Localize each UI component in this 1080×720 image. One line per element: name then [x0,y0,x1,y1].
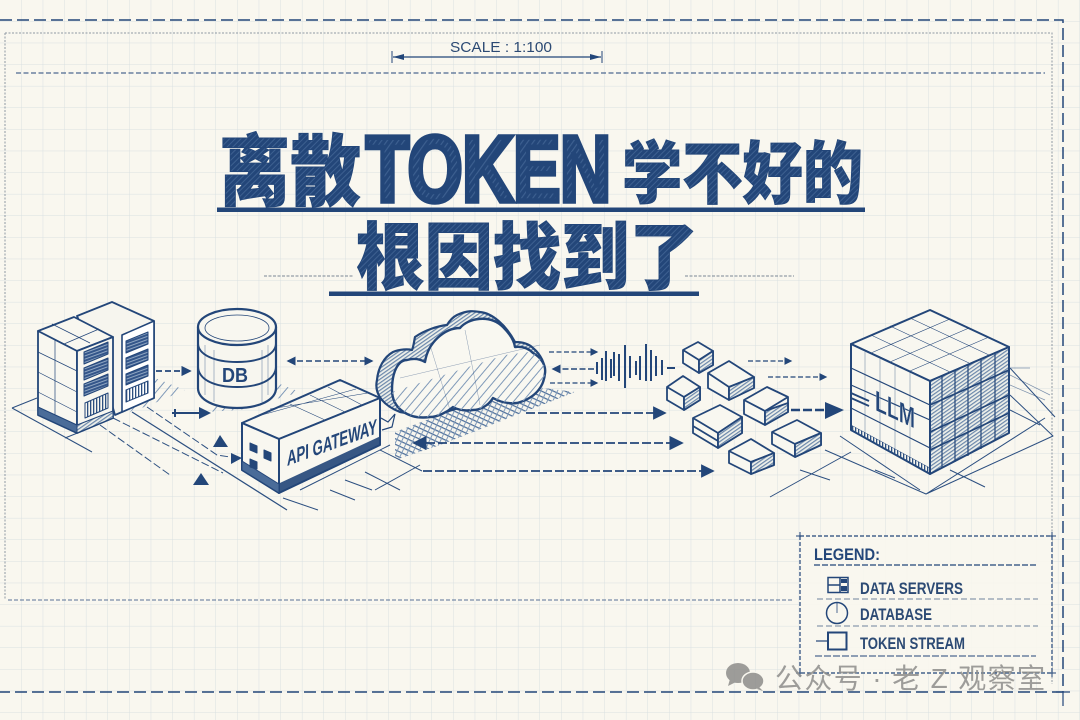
icon: llm cube [851,310,1009,474]
connector: gateway to cloud [381,414,395,430]
token block 3 [667,376,700,410]
floor grid: servers [12,378,300,510]
token block 6 [772,420,821,457]
token block 7 [729,439,774,474]
legend heading: LEGEND: [814,545,880,564]
icon: database cylinder [198,309,276,408]
title [219,118,863,299]
icon: api gateway box: API GATEWAY [287,414,377,471]
title: 学不好的 [622,137,863,213]
scale bar: SCALE : 1:100 [450,39,552,56]
icon: cloud [376,311,575,460]
scale bar [392,39,602,63]
icon: data servers [38,302,154,433]
token block 4 [744,387,788,425]
legend icon: database [826,602,848,624]
title: TOKEN [366,118,611,222]
arrow: db to cloud [288,360,372,362]
watermark [726,663,1045,694]
token blocks [667,342,821,474]
legend label: token stream: TOKEN STREAM [860,635,965,653]
legend icon: token stream [816,632,846,650]
icon: database cylinder: DB [222,365,248,387]
arrows: tokens to llm [748,361,844,419]
token block 1 [683,342,713,373]
icon: wechat bubbles [726,663,764,691]
title: 根因找到了 [356,218,698,299]
title: 离散 [219,128,361,216]
floor grid: llm [770,368,1055,497]
legend label: database: DATABASE [860,606,932,624]
icon: llm cube: LLM [875,384,915,435]
icon: api gateway box [242,380,380,493]
watermark text: 公众号 · 老 Z 观察室 [775,663,1045,694]
legend [796,532,1056,677]
arrow: servers to db [156,370,190,372]
floor grid: gateway [283,445,422,510]
token block 2 [708,361,754,400]
title underlines [217,208,865,296]
legend icon: data servers [828,578,848,592]
arrows: cloud to tokens [414,352,713,471]
arrows: servers to gateway [172,407,242,485]
legend label: data servers: DATA SERVERS [860,580,963,598]
token block 5 [693,405,742,448]
icon: sound wave token stream [597,344,675,388]
